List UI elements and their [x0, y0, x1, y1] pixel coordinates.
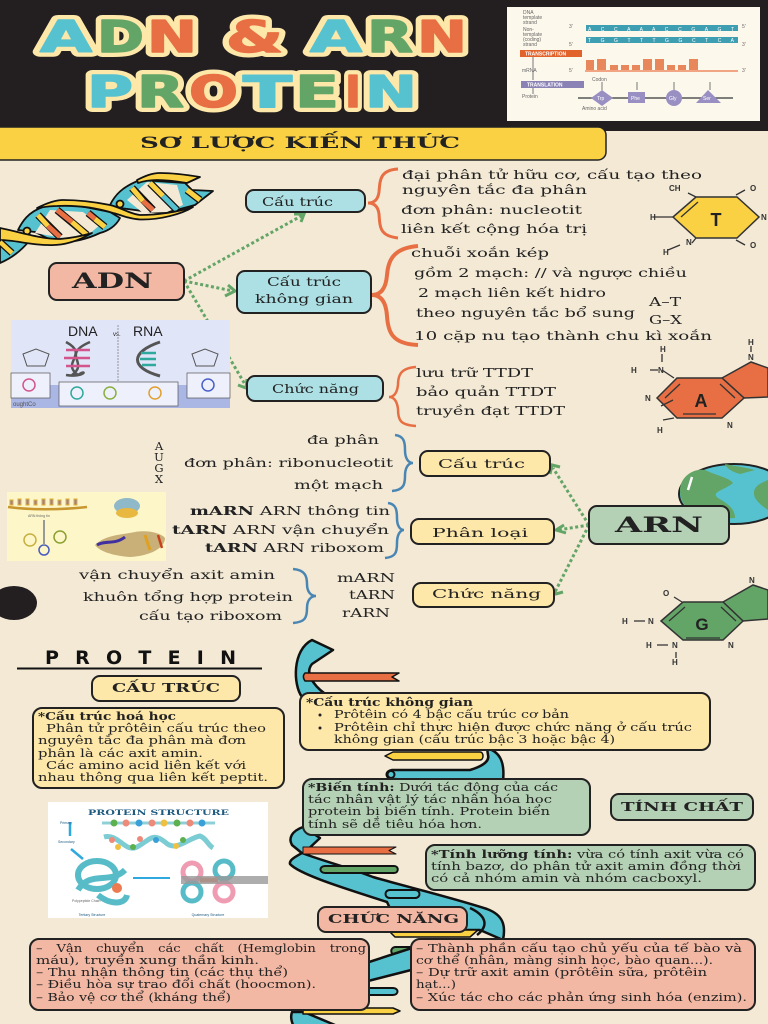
diagram: transcription and translation: DNA: [523, 10, 534, 16]
text: cấu trúc không gian ADN: A–T: [648, 294, 682, 309]
diagram: transcription and translation: 3': [742, 42, 746, 48]
title: N: [365, 67, 417, 118]
icon: adenine molecule: [631, 338, 768, 435]
panel: cấu trúc không gian: [300, 693, 710, 750]
box: ARN: ARN: [613, 512, 703, 537]
text: phân loại ARN: mARN ARN thông tin: [190, 503, 390, 518]
panel: chức năng trái: máu), truyền xung thần kinh.: [36, 954, 259, 967]
text: cấu trúc ADN: nguyên tắc đa phân: [402, 182, 587, 197]
text: chức năng ADN: bảo quản TTDT: [416, 384, 557, 399]
diagram: transcription and translation: A C C A A A C C G A G T: [588, 27, 734, 33]
icon: guanine molecule: H: [622, 617, 628, 626]
icon: guanine molecule: G: [695, 615, 709, 634]
text: chức năng ADN: [416, 365, 566, 418]
diagram: transcription and translation: T G G T T T G G C T C A: [588, 38, 735, 44]
diagram: transcription and translation: Amino acid: [582, 106, 607, 112]
text: chức năng ADN: truyền đạt TTDT: [416, 403, 566, 418]
icon: thymine molecule: H: [663, 248, 669, 257]
icon: adenine molecule: N: [748, 353, 754, 362]
diagram: transcription and translation: strand: [523, 20, 537, 26]
diagram: transcription and translation: (coding): [523, 37, 541, 43]
image: DNA vs RNA: RNA: [133, 323, 163, 339]
diagram: transcription and translation: 5': [569, 68, 573, 74]
title: A: [40, 12, 92, 63]
letters: A U G X: [154, 439, 164, 486]
text: cấu trúc ARN: đơn phân: ribonucleotit: [184, 455, 393, 470]
title: R: [367, 12, 413, 63]
diagram: transcription and translation: Non-: [523, 27, 534, 33]
title: &: [226, 12, 283, 63]
diagram: transcription and translation: 5': [742, 24, 746, 30]
box: Cấu trúc: Cấu trúc: [262, 194, 333, 209]
title: P: [87, 67, 133, 118]
box: ARN: [589, 506, 729, 544]
diagram: transcription and translation: 3': [569, 24, 573, 30]
brace: orange 2: [372, 246, 418, 345]
panel: tính lưỡng tính: tính bazơ, do phân tử axit amin đồng thời: [431, 860, 742, 873]
panel: chức năng trái: – Vận chuyển các chất (Hemglobin trong: [36, 941, 366, 955]
panel: cấu trúc không gian: không gian (cấu trúc bậc 3 hoặc bậc 4): [334, 733, 615, 746]
icon: guanine molecule: N: [648, 617, 654, 626]
title: R: [137, 67, 184, 118]
letters: A U G X: G: [154, 461, 164, 475]
icon: thymine molecule: O: [750, 241, 756, 250]
image: protein structure: [48, 802, 268, 918]
title: R: [367, 12, 413, 63]
box: CẤU TRÚC heading: CẤU TRÚC: [112, 678, 220, 695]
icon: thymine molecule: O: [750, 184, 756, 193]
image: DNA vs RNA: oughtCo: [13, 402, 36, 408]
diagram: transcription and translation: Protein: [522, 94, 538, 100]
arrows: ADN branches: [184, 214, 304, 388]
text: cấu trúc không gian ADN: chuỗi xoắn kép: [411, 245, 549, 260]
title: &: [226, 12, 283, 63]
diagram: transcription and translation: Phe: [631, 96, 640, 102]
icon: adenine molecule: H: [748, 338, 754, 347]
title: P: [87, 67, 133, 118]
box: TÍNH CHẤT heading: TÍNH CHẤT: [621, 797, 744, 814]
icon: adenine molecule: N: [645, 394, 651, 403]
panel: biến tính: *Biến tính: Dưới tác động của các: [308, 781, 558, 794]
image: protein structure: PROTEIN STRUCTURE: [88, 808, 229, 817]
text: cấu trúc không gian ADN: G–X: [649, 312, 682, 327]
box: ADN: [49, 263, 184, 300]
icon: dna helix: [0, 173, 213, 263]
panel: biến tính: tác nhân vật lý tác nhân hóa học: [308, 793, 552, 806]
image: protein structure: Polypeptide Chain: [72, 899, 100, 903]
diagram: transcription and translation: [507, 7, 760, 121]
panel: chức năng phải: [411, 939, 755, 1010]
title: A: [310, 12, 362, 63]
text: mARN tARN rARN: [337, 570, 395, 620]
text: mARN tARN rARN: mARN: [337, 570, 395, 585]
title: O: [189, 67, 238, 118]
text: cấu trúc ADN: đại phân tử hữu cơ, cấu tạo theo: [402, 167, 702, 182]
image: protein structure: Tertiary Structure: [79, 913, 105, 917]
helix: central protein ribbon: [290, 640, 504, 1024]
panel: chức năng trái: – Thu nhận thông tin (các thụ thể): [36, 965, 288, 979]
text: cấu trúc ADN: liên kết cộng hóa trị: [401, 221, 587, 236]
box: TÍNH CHẤT heading: [611, 794, 753, 820]
diagram: transcription and translation: Codon: [592, 77, 607, 83]
icon: guanine molecule: N: [749, 576, 755, 585]
image: protein structure: Quaternary Structure: [192, 913, 224, 917]
text: cấu trúc không gian ADN: 10 cặp nu tạo thành chu kì xoắn: [414, 328, 712, 343]
title: E: [295, 67, 339, 118]
panel: cấu trúc không gian: Prôtêin chỉ thực hiện được chức năng ở cấu trúc: [334, 721, 692, 734]
text: cấu trúc không gian ADN: 2 mạch liên kết hidro: [418, 285, 606, 300]
panel: cấu trúc hoá học: *Cấu trúc hoá học: [38, 710, 177, 723]
image: DNA vs RNA: DNA: [68, 323, 98, 339]
text: chức năng ADN: lưu trữ TTDT: [416, 365, 534, 380]
icon: adenine molecule: A: [694, 391, 708, 411]
title: E: [295, 67, 339, 118]
icon: globe: [679, 464, 768, 524]
text: cấu trúc ARN: đa phân: [307, 432, 379, 447]
icon: thymine molecule: H: [650, 213, 656, 222]
box: Chức năng: [247, 376, 383, 401]
text: phân loại ARN: tARN ARN vận chuyển: [172, 522, 389, 537]
panel: chức năng trái: [30, 939, 369, 1010]
icon: adenine molecule: H: [657, 426, 663, 435]
box: Cấu trúc: [246, 190, 365, 212]
diagram: transcription and translation: Ser: [703, 96, 711, 102]
title: N: [147, 12, 197, 63]
panel: biến tính: protein bị biến tính. Protein biến: [308, 805, 550, 818]
panel: cấu trúc hoá học: nguyên tắc đa phân mà đơn: [38, 734, 246, 747]
panel: cấu trúc hoá học: phân là các axit amin.: [38, 747, 203, 760]
title: A: [40, 12, 92, 63]
panel: chức năng trái: – Bảo vệ cơ thể (kháng thể): [36, 990, 231, 1004]
text: chức năng ARN: khuôn tổng hợp protein: [83, 589, 293, 604]
diagram: transcription and translation: 3': [742, 68, 746, 74]
panel: chức năng phải: – Dự trữ axit amin (prôtêin sữa, prôtêin: [416, 966, 707, 979]
image: protein structure: Primary: [60, 821, 72, 825]
icon: thymine molecule: N: [761, 213, 767, 222]
text: phân loại ARN: [172, 503, 390, 555]
diagram: transcription and translation: mRNA: [522, 68, 537, 74]
icon: thymine molecule: CH: [669, 184, 681, 193]
image: ARN types: [7, 492, 166, 561]
box: Cấu trúc ARN: [420, 451, 550, 476]
title: D: [97, 12, 144, 63]
title: T: [243, 67, 292, 118]
diagram: transcription and translation: 5': [569, 42, 573, 48]
panel: cấu trúc không gian: Prôtêin có 4 bậc cấu trúc cơ bản: [334, 708, 569, 721]
diagram: transcription and translation: TRANSLATION: [527, 82, 563, 88]
box: Cấu trúc ARN: Cấu trúc: [438, 456, 525, 471]
title: D: [97, 12, 144, 63]
section heading bar: SƠ LƯỢC KIẾN THỨC: [140, 130, 460, 152]
title: T: [243, 67, 292, 118]
box: Chức năng ARN: [413, 583, 554, 607]
box: Phân loại: Phân loại: [432, 525, 528, 540]
text: cấu trúc ADN: đơn phân: nucleotit: [401, 202, 582, 217]
brace: orange 3: [389, 367, 416, 426]
text: cấu trúc không gian ADN: [411, 245, 712, 343]
panel: chức năng phải: hạt...): [416, 978, 456, 991]
panel: chức năng phải: cơ thể (nhân, màng sinh học, bào quan...).: [416, 953, 713, 967]
diagram: transcription and translation: Gly: [669, 96, 677, 102]
panel: cấu trúc hoá học: Phân tử prôtêin cấu trúc theo: [46, 722, 266, 735]
box: CHỨC NĂNG heading: CHỨC NĂNG: [328, 910, 459, 926]
panel: cấu trúc hoá học: Các amino acid liên kết với: [46, 759, 247, 772]
icon: guanine molecule: [622, 576, 768, 667]
title: N: [147, 12, 197, 63]
letters: A U G X: X: [155, 472, 164, 486]
diagram: transcription and translation: template: [523, 32, 542, 38]
box: Chức năng ARN: Chức năng: [432, 586, 541, 601]
text: mARN tARN rARN: rARN: [342, 605, 390, 620]
panel: cấu trúc không gian: *Cấu trúc không gian: [306, 696, 473, 709]
box: Cấu trúc không gian: Cấu trúc: [267, 274, 341, 289]
text: cấu trúc ADN: [401, 167, 702, 236]
brace: orange 1: [368, 169, 398, 238]
box: ADN: ADN: [70, 268, 153, 293]
text: cấu trúc ARN: một mạch: [294, 477, 383, 492]
image: protein structure: Secondary: [58, 840, 75, 844]
icon: adenine molecule: H: [631, 366, 637, 375]
text: cấu trúc không gian ADN: theo nguyên tắc bổ sung: [416, 305, 635, 320]
text: chức năng ARN: cấu tạo riboxom: [139, 608, 282, 623]
text: cấu trúc không gian ADN: gồm 2 mạch: // và ngược chiều: [414, 265, 687, 280]
panel: chức năng trái: – Điều hòa sự trao đổi chất (hoocmon).: [36, 978, 316, 991]
title: O: [189, 67, 238, 118]
title: I: [345, 67, 361, 118]
title: R: [137, 67, 184, 118]
icon: thymine molecule: T: [710, 210, 722, 230]
section heading bar: [0, 127, 606, 160]
panel: cấu trúc hoá học: [33, 708, 284, 788]
title: I: [345, 67, 361, 118]
panel: tính lưỡng tính: [426, 845, 755, 890]
box: CHỨC NĂNG heading: [318, 907, 467, 932]
text: chức năng ARN: [78, 567, 293, 623]
image: DNA vs RNA: vs.: [113, 332, 121, 338]
heading: PROTEIN: PROTEIN: [45, 647, 236, 669]
text: phân loại ARN: tARN ARN riboxom: [205, 540, 384, 555]
letters: A U G X: A: [154, 439, 164, 453]
box: Cấu trúc không gian: [237, 271, 371, 313]
box: Phân loại: [411, 519, 554, 544]
panel: chức năng phải: – Thành phần cấu tạo chủ yếu của tế bào và: [416, 942, 743, 955]
icon: black circle: [0, 586, 37, 620]
box: CẤU TRÚC heading: [92, 676, 240, 701]
panel: cấu trúc hoá học: nhau thông qua liên kết peptit.: [38, 771, 268, 784]
panel: tính lưỡng tính: *Tính lưỡng tính: vừa có tính axit vừa có: [431, 848, 744, 861]
icon: adenine molecule: N: [727, 421, 733, 430]
text: chức năng ARN: vận chuyển axit amin: [78, 567, 275, 582]
icon: thymine molecule: N: [686, 238, 692, 247]
panel: chức năng phải: – Xúc tác cho các phản ứng sinh hóa (enzim).: [416, 991, 747, 1004]
title: N: [365, 67, 417, 118]
icon: guanine molecule: N: [672, 641, 678, 650]
brace: blue 1: [392, 435, 413, 491]
title: N: [417, 12, 467, 63]
diagram: transcription and translation: strand: [523, 42, 537, 48]
header band: [0, 0, 768, 131]
text: mARN tARN rARN: tARN: [349, 587, 395, 602]
brace: blue 3: [293, 569, 316, 623]
letters: A U G X: U: [154, 450, 164, 464]
icon: adenine molecule: N: [658, 366, 664, 375]
brace: blue 2: [385, 503, 404, 558]
diagram: transcription and translation: Trp: [597, 96, 605, 102]
image: ARN types: ARN thông tin: [28, 514, 50, 518]
box: Cấu trúc không gian: không gian: [255, 291, 353, 306]
text: cấu trúc ARN: [184, 432, 393, 492]
icon: guanine molecule: N: [728, 641, 734, 650]
diagram: transcription and translation: template: [523, 15, 542, 21]
diagram: transcription and translation: TRANSCRIPTION: [525, 52, 566, 58]
panel: biến tính: tính sẽ dễ tiêu hóa hơn.: [308, 818, 482, 831]
title: A: [310, 12, 362, 63]
image: DNA vs RNA: [11, 320, 230, 408]
icon: adenine molecule: H: [660, 345, 666, 354]
panel: biến tính: [303, 779, 590, 835]
icon: guanine molecule: H: [646, 641, 652, 650]
title: [40, 12, 467, 118]
arrows: ARN branches: [550, 465, 589, 594]
icon: guanine molecule: H: [672, 658, 678, 667]
box: Chức năng: Chức năng: [272, 381, 359, 396]
icon: guanine molecule: O: [663, 589, 669, 598]
panel: tính lưỡng tính: có cả nhóm amin và nhóm cacboxyl.: [431, 872, 702, 885]
icon: thymine molecule: [650, 184, 767, 257]
title: N: [417, 12, 467, 63]
